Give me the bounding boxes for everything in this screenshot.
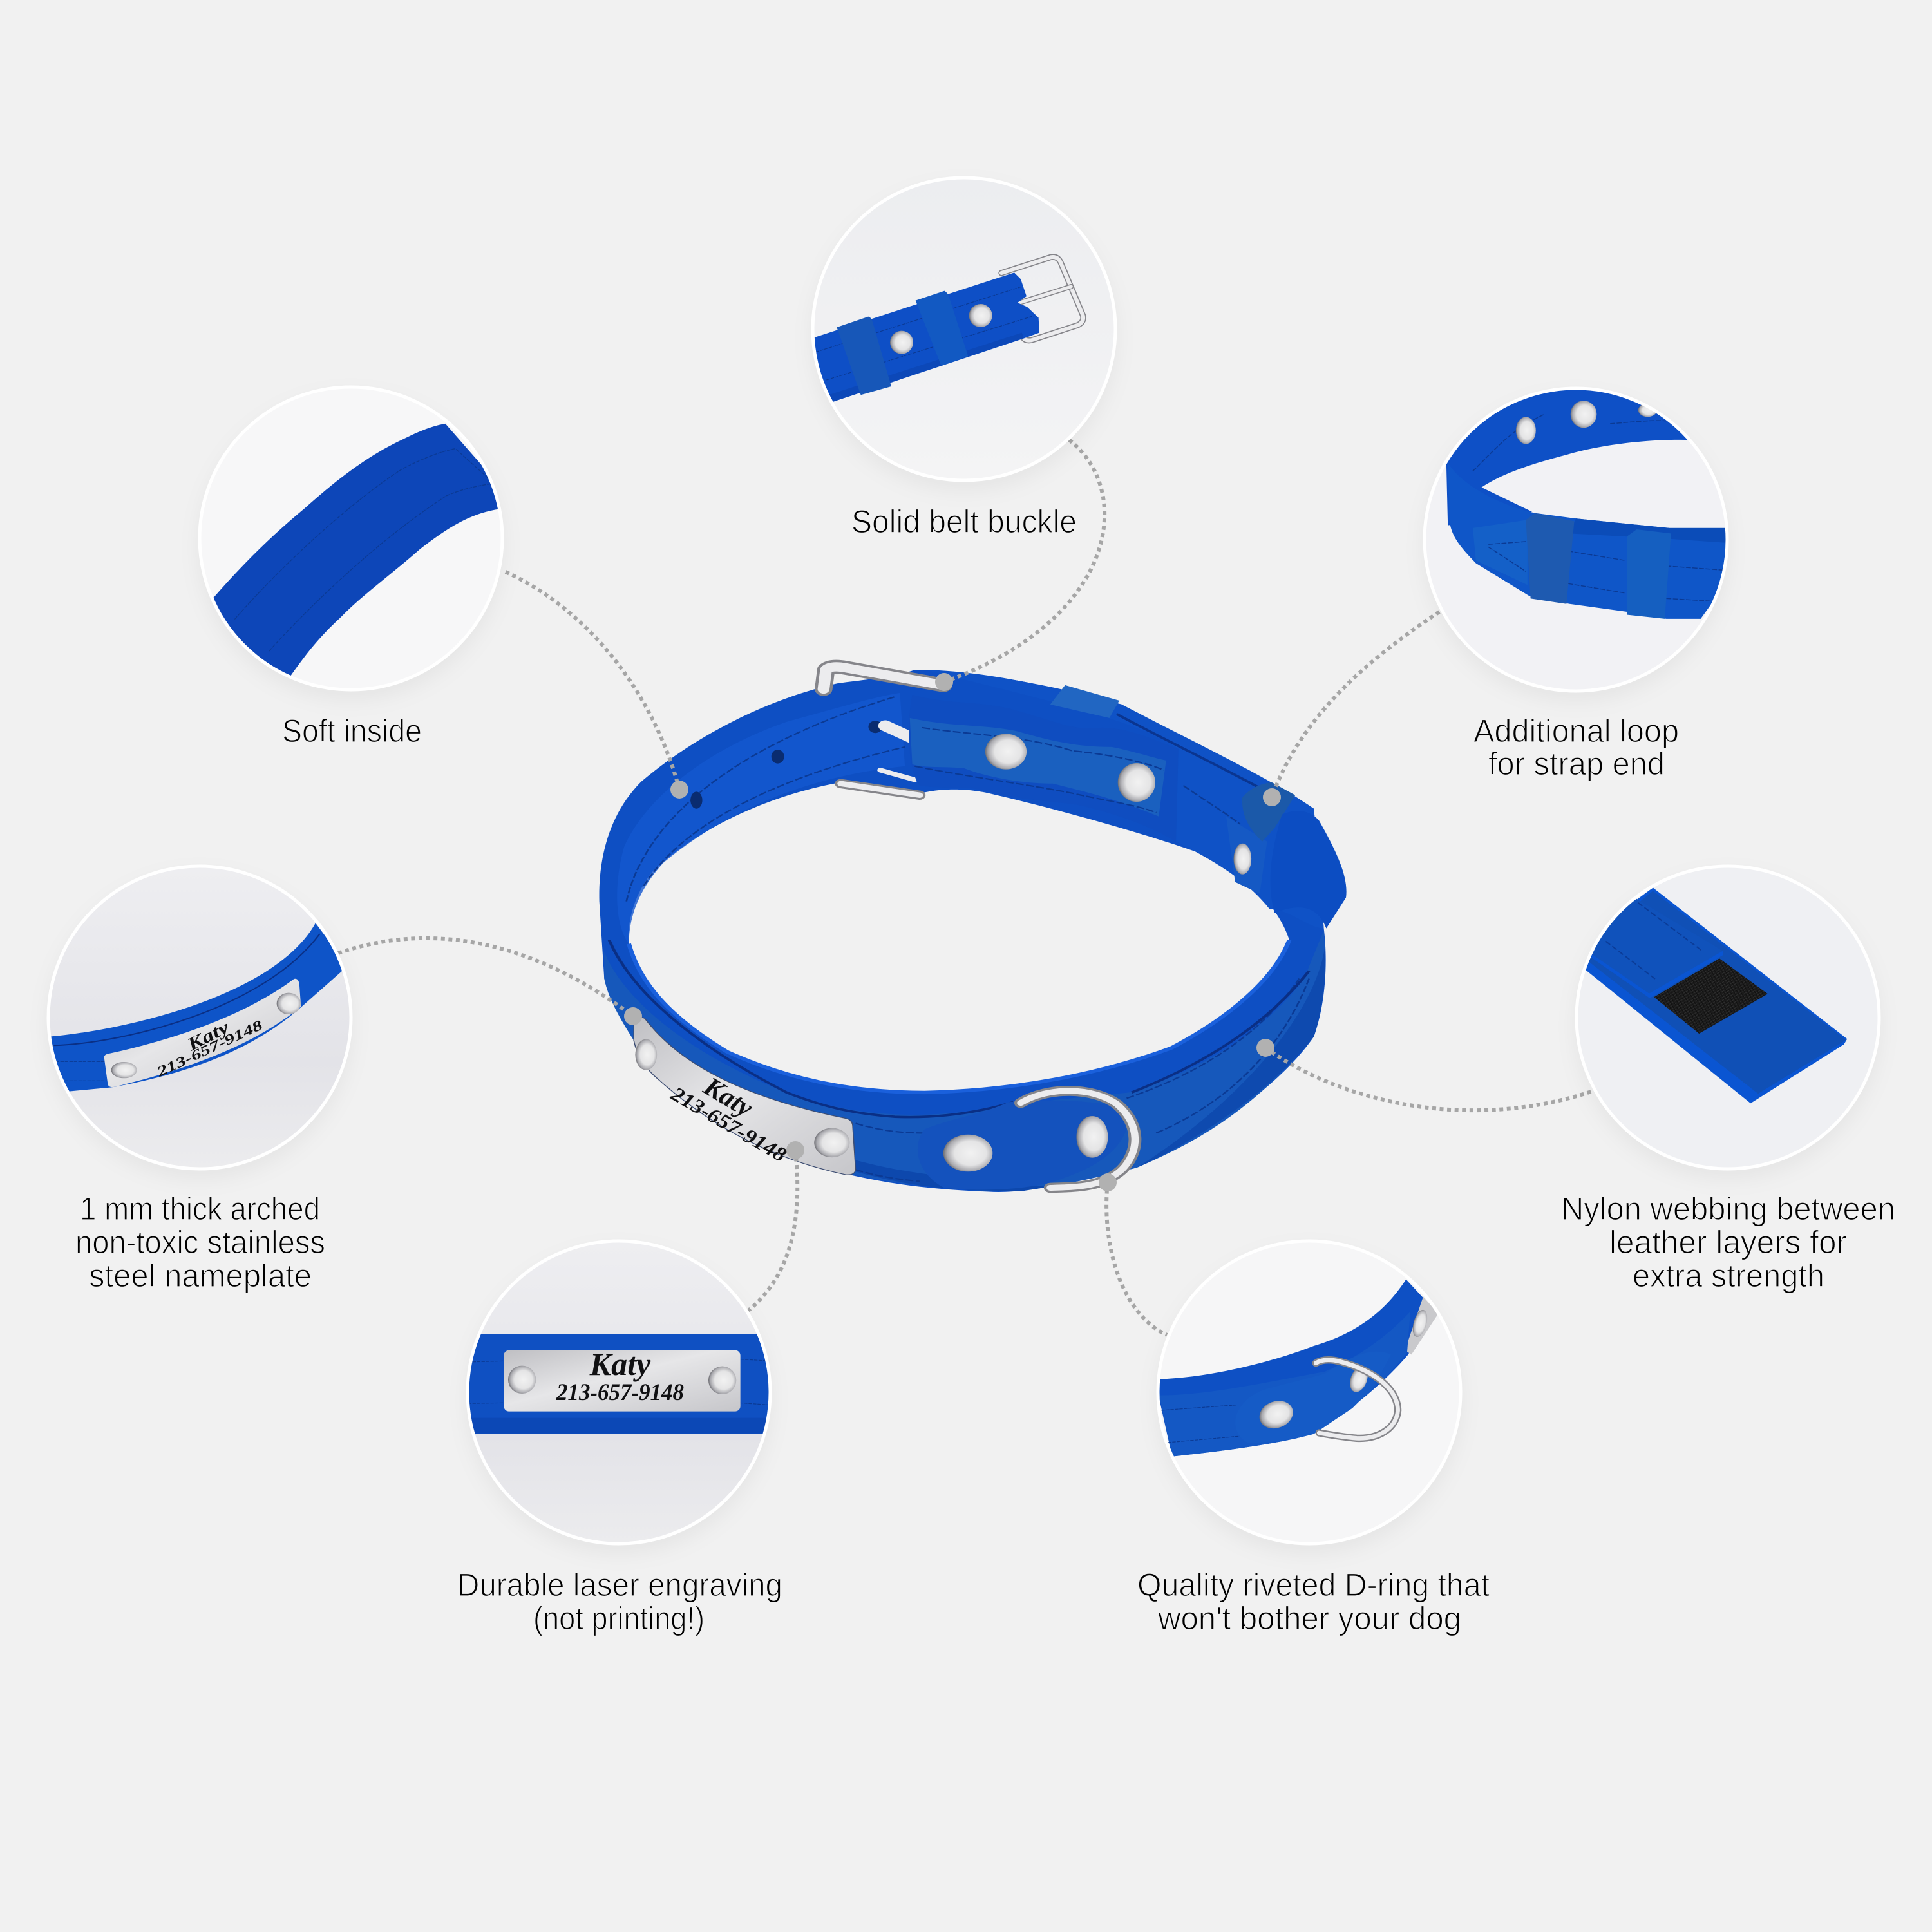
label: nylon webbing (1561, 1191, 1895, 1294)
strap stitching (922, 728, 1164, 770)
label: laser engraving: (not printing!) (533, 1600, 705, 1636)
label: nameplate (75, 1191, 325, 1294)
strap smooth face (910, 718, 1166, 817)
D-ring rivets (943, 1135, 992, 1171)
label: additional loop (1473, 713, 1679, 782)
lower leather (1565, 887, 1847, 1103)
band (47, 923, 348, 1092)
rivet tab at loop (1226, 817, 1267, 894)
panel: arched nameplate (47, 866, 352, 1170)
lower band shading (856, 1160, 1048, 1191)
label: nameplate: non-toxic stainless (75, 1224, 325, 1260)
keeper loop (1050, 685, 1119, 718)
nameplate (634, 1018, 856, 1175)
strap (814, 272, 1039, 402)
nameplate engraving on collar: 213-657-9148 (667, 1081, 791, 1166)
panel: solid belt buckle (799, 177, 1116, 481)
rivets (1256, 1396, 1297, 1433)
outer smooth leather band (604, 931, 1325, 1191)
dark groove (609, 940, 1309, 1117)
suede band (214, 424, 498, 676)
suede back (1446, 384, 1691, 526)
label: laser engraving (457, 1567, 782, 1636)
strap rivets (985, 734, 1027, 770)
panel: additional loop (1424, 384, 1728, 692)
panel: nylon webbing (1565, 866, 1880, 1170)
plate edge (1405, 1296, 1438, 1354)
panel: laser engraving: 213-657-9148 (556, 1379, 684, 1406)
label: riveted D-ring: won't bother your dog (1157, 1600, 1461, 1636)
label: nylon webbing: extra strength (1633, 1258, 1824, 1294)
collar silhouette (599, 670, 1326, 1192)
additional loop (1242, 782, 1295, 842)
upper leather (1578, 898, 1723, 994)
smooth leather (1159, 1312, 1410, 1457)
lighter inner suede (617, 693, 905, 944)
rivets (111, 1062, 137, 1078)
webbing (1654, 958, 1768, 1034)
panel: laser engraving (464, 1240, 799, 1544)
label: nylon webbing: Nylon webbing between (1561, 1191, 1895, 1227)
label: soft inside: Soft inside (282, 713, 422, 749)
punched holes (690, 721, 882, 809)
label: additional loop: for strap end (1488, 746, 1665, 782)
buckle (824, 667, 943, 795)
plate rivets (635, 1039, 657, 1070)
panel: riveted D-ring (1155, 1240, 1461, 1544)
outer band stitching (1156, 979, 1309, 1133)
front strap (1450, 512, 1726, 619)
label: nylon webbing: leather layers for (1609, 1224, 1847, 1260)
band (464, 1334, 799, 1434)
rivets (508, 1366, 536, 1394)
suede rivets (1516, 417, 1536, 444)
main collar illustration (599, 667, 1347, 1192)
D-ring (1316, 1360, 1398, 1438)
rivets (890, 331, 913, 354)
label: laser engraving: Durable laser engraving (457, 1567, 782, 1603)
loops (1526, 513, 1574, 604)
suede stitching (627, 697, 895, 902)
panel: soft inside (194, 386, 513, 692)
band (1155, 1280, 1434, 1457)
suede rim highlight (629, 940, 1289, 1092)
plate engraving: Katy (184, 1017, 232, 1056)
nameplate engraving on collar: Katy (698, 1072, 758, 1124)
plate (504, 1350, 741, 1412)
wavy strap (909, 695, 1179, 842)
top band groove (1117, 714, 1269, 793)
D-ring tab (918, 1100, 1132, 1189)
engraved text: Katy (589, 1346, 651, 1382)
anchor dots (624, 673, 1281, 1191)
label: nameplate: 1 mm thick arched (80, 1191, 320, 1227)
D-ring (1021, 1091, 1135, 1188)
top band behind strap (925, 670, 1324, 929)
label: additional loop: Additional loop (1473, 713, 1679, 749)
tab (1235, 1352, 1391, 1443)
label: riveted D-ring (1137, 1567, 1490, 1636)
label: riveted D-ring: Quality riveted D-ring that (1137, 1567, 1490, 1603)
upper leather edge (1591, 951, 1723, 998)
label: solid belt buckle: Solid belt buckle (851, 504, 1077, 540)
buckle frame (1001, 257, 1083, 341)
panel: arched nameplate: 213-657-9148 (153, 1017, 265, 1080)
label: nameplate: steel nameplate (89, 1258, 312, 1294)
keepers (837, 317, 891, 395)
plate (104, 979, 301, 1087)
dotted connector lines (338, 440, 1595, 1335)
strap end (1271, 811, 1347, 929)
